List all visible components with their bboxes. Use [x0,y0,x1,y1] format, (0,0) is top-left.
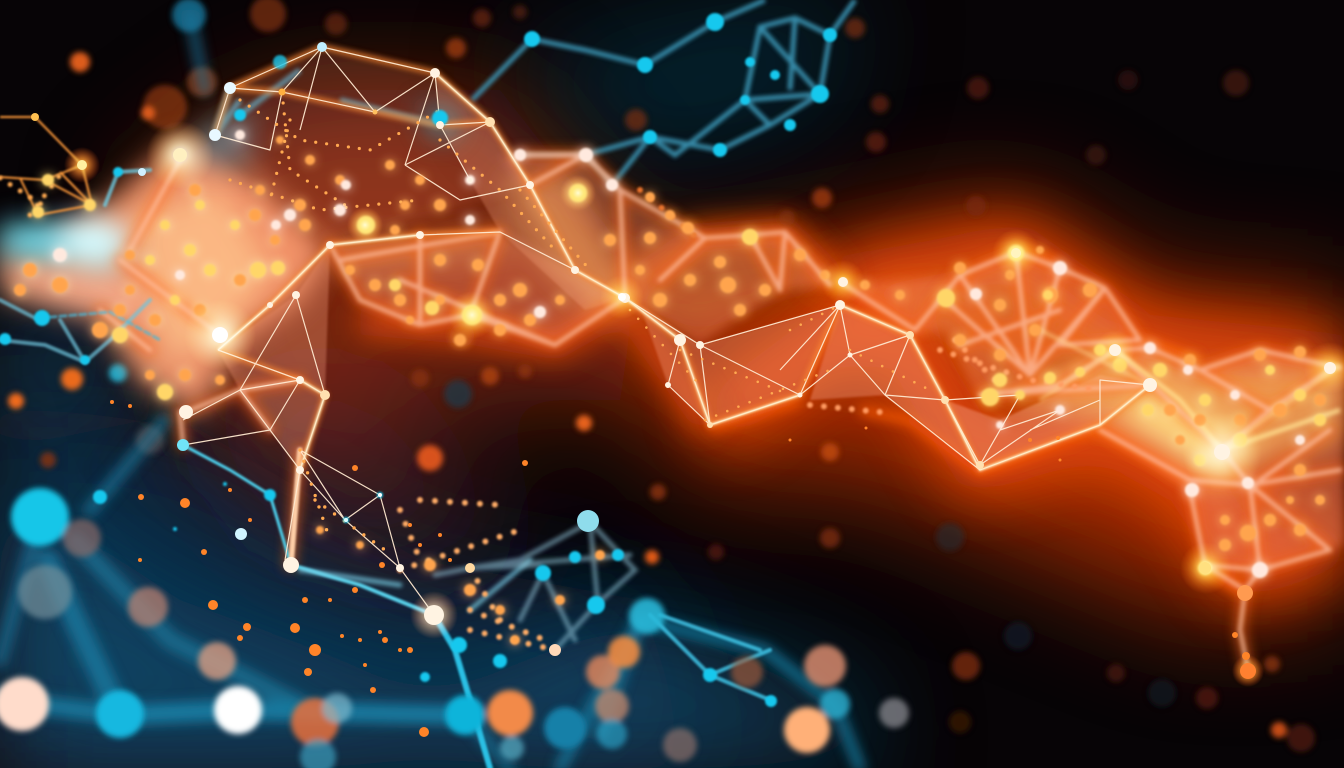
translucent defocused ribbon surfaces [215,47,1344,570]
background navy haze [0,400,700,768]
defocused mesh line glow [100,155,1340,670]
scattered sparks [110,400,1250,737]
mesh edge orange glow [215,47,1150,470]
blue mesh: top chain [215,0,855,185]
sharp orange top-left strand [0,117,92,215]
blurred foreground blue network [0,15,860,768]
defocused salmon mesh lines [100,155,1340,670]
left cyan glow [0,105,460,272]
dotted orange strands [0,92,1100,650]
background red-orange glow [130,90,1344,620]
bright cream mesh edges [218,73,1340,470]
cyan nodes [0,13,837,707]
translucent front ribbon surfaces [218,73,1150,470]
ribbon edge glow [360,232,1344,592]
hot spots [64,121,1344,687]
ribbon luminous wash [330,170,1344,490]
glowing node halos [14,130,1326,645]
left glowing blob [0,140,330,415]
defocused glowing nodes [14,130,1326,645]
sharp cream mesh lines [183,47,1150,615]
blurred foreground bokeh [0,488,909,768]
lower peach and blue strands [0,170,770,768]
background blue glow [0,0,870,768]
